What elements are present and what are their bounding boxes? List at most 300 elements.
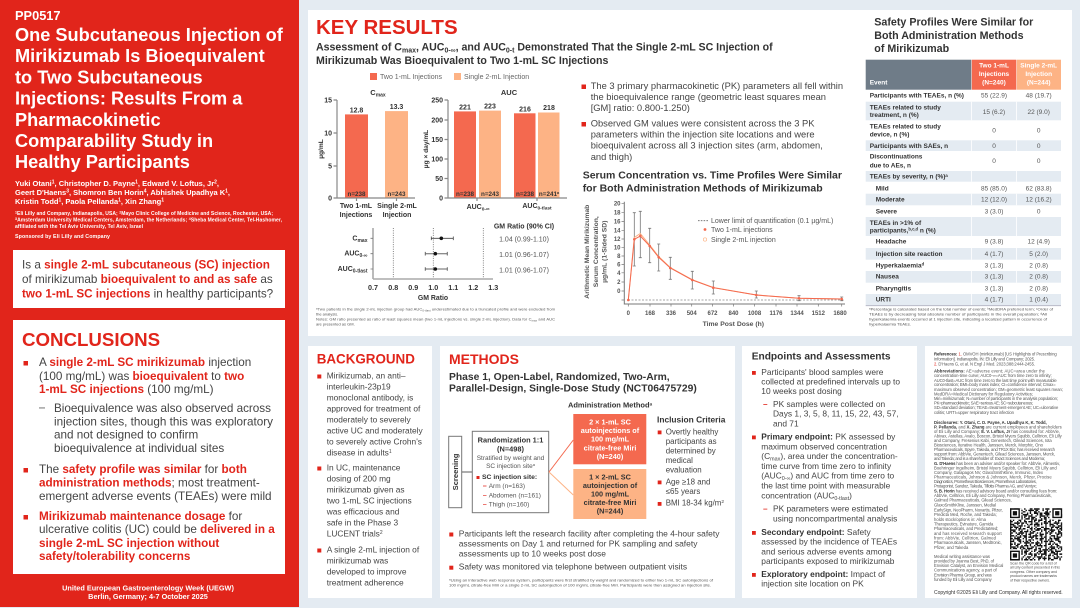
references: Information]. Indianapolis, IN: Eli Lilly and Company; 2025. (934, 356, 1035, 362)
footnote: key results: ᵃTwo patients in the single 2-mL injection group had AUC (316, 306, 422, 312)
disclosures: and Company, Fresenius Kabi, Genentech, Gilead Sciences, Iota (934, 438, 1052, 443)
line chart: serum concentration: 1344 (790, 311, 804, 317)
forest plot: GM ratio: C (352, 236, 357, 242)
subheading: assessment: Assessment of C (316, 42, 402, 54)
background bullet 2: safe in the Phase 3 (327, 517, 398, 527)
key findings bullets: The 3 primary pharmacokinetic (PK) parameters all fell within (591, 81, 843, 91)
table header (866, 60, 1061, 90)
authors: , Christopher D. Payne (55, 179, 135, 188)
title: One Subcutaneous Injection of (15, 25, 284, 45)
table values: single 2-mL: 2 (0.8) (1029, 274, 1048, 281)
table values: two 1-mL (981, 93, 1007, 304)
disclosures: G. D'Haens has been an adviser and/or speaker for: AbbVie, Alimentiv, (934, 461, 1060, 466)
table values: single 2-mL: 2 (0.8) (1029, 285, 1048, 292)
endpoint bullet: exploratory: injection site location on PK (761, 579, 864, 589)
QR caption: all Lilly content presented in this (1010, 566, 1060, 570)
table values: two 1-mL: 85 (85.0) (981, 185, 1007, 192)
background bullet 2: In UC, maintenance (327, 462, 401, 472)
key findings bullets (582, 81, 843, 162)
forest plot: GM ratio: 1.2 (468, 283, 478, 292)
disclosures: Protagonist, Sandoz, Takeda, Tillotts Pharma AG, and Ventyx; (934, 484, 1037, 489)
table values: single 2-mL: 1 (0.4) (1029, 297, 1048, 304)
title: Comparability Study in (15, 131, 213, 151)
abbreviations: Abbreviations: AE=adverse event; AUC=area under the (934, 368, 1046, 374)
sponsor: Sponsored by Eli Lilly and Company (15, 234, 110, 240)
line chart: serum concentration: 18 (614, 211, 621, 217)
bar chart: AUC: 100 (431, 156, 443, 164)
background bullet 1: approved for treatment of (327, 403, 421, 413)
title: to Two Subcutaneous (15, 67, 203, 87)
forest plot: GM ratio: 0-∞ (359, 253, 368, 259)
conclusion bullet 3: safety/tolerability concerns (39, 550, 191, 563)
table header: Event (870, 80, 888, 87)
forest plot: GM ratio: 0.9 (408, 283, 418, 292)
disclosures: AbbVie, Celltrion, Eli Lilly and Company, Ferring Pharmaceuticals, (934, 493, 1052, 498)
panel: methods (440, 346, 735, 598)
heading: serum concentration: for Both Administration Methods of Mirikizumab (583, 183, 823, 195)
abbreviations: colitis; URTI=upper respiratory tract infection (934, 410, 1015, 415)
background bullet 2: two 1-mL SC injections (327, 495, 412, 505)
authors: Kristin Todd (15, 197, 58, 206)
conclusion bullet 1 (24, 356, 273, 455)
conclusion bullet 3: ulcerative colitis (UC) could be delivered in a (39, 523, 275, 536)
bar chart: AUC: 150 (431, 137, 443, 144)
panel: endpoints and assessments (742, 346, 917, 598)
table row labels: Moderate (876, 197, 905, 204)
methods bullets: Safety was monitored via telephone between outpatient visits (459, 562, 687, 572)
footnote: key results (316, 306, 556, 326)
disclosures: Predicta Med, Roche, and Takeda; (934, 512, 997, 517)
authors: 1 (161, 198, 164, 204)
bar chart: AUC: AUC (467, 204, 482, 211)
bar chart: AUC: 0-tlast (538, 206, 552, 212)
arrow: to single 2-mL arm (549, 472, 573, 495)
table values: single 2-mL (1026, 93, 1052, 304)
methods bullets (449, 528, 720, 572)
bar chart: AUC: AUC (501, 88, 518, 97)
table row labels: Severe (876, 208, 897, 215)
endpoint bullet: sampling: collected at predefined intervals up to (761, 376, 900, 386)
disclosures: Diagnostics, Prometheus Biosciences, Prometheus Laboratories, (934, 479, 1037, 484)
line chart: serum concentration: Serum Concentration, (593, 216, 600, 287)
conclusion bullet 1: injection sites, though this was exploratory (54, 416, 273, 428)
endpoint bullet: primary: concentration (AUC (761, 490, 834, 500)
table values: two 1-mL: 12 (12.0) (981, 197, 1007, 204)
authors: 1 (225, 188, 228, 194)
inclusion criteria: participants as (666, 437, 717, 446)
medical writing note: Envision Pharma Group, and was (934, 572, 992, 577)
bar chart: Cmax: Injections (340, 212, 372, 219)
endpoint bullet: primary: PK parameters were estimated (773, 504, 888, 514)
footnote: safety table: hyperkalaemia TEAEs. (869, 322, 911, 326)
bar chart: Cmax: 0 (328, 196, 332, 202)
box: single 2-mL arm: 1 × 2-mL SC (589, 472, 632, 481)
panel: title sidebar (0, 0, 299, 607)
line chart: serum concentration: 10 (614, 246, 621, 252)
background bullet 2: mirikizumab given as (327, 484, 405, 494)
bar chart: Cmax: n=243 (387, 191, 406, 198)
title: Mirikizumab Is Bioequivalent (15, 46, 265, 66)
conclusion bullet 1: bioequivalence at individual sites (54, 442, 224, 455)
subheading: assessment: 0-t (506, 48, 515, 54)
background bullet 1 (317, 370, 424, 457)
bar chart: Cmax: C (370, 88, 376, 97)
background bullet 2 (317, 462, 412, 538)
table header: Single 2-mL (1020, 62, 1057, 70)
label: administration method: a (650, 401, 653, 406)
subheading: assessment: Mirikizumab Was Bioequivalent to Two 1-mL SC Injections (316, 55, 608, 67)
inclusion criteria: Inclusion Criteria (657, 415, 726, 425)
label: administration method: Administration Method (568, 400, 650, 409)
abbreviations: Miri=mirikizumab; N=number of participants in the analysis population; (934, 396, 1058, 401)
authors: , (228, 188, 230, 197)
heading: safety profiles: Safety Profiles Were Similar for (874, 17, 1033, 29)
bar chart: Cmax: 15 (324, 98, 332, 104)
disclosures: Abivax, Astellas, Avalo, Boscon, Bristol Myers Squibb, Celltrion, Eli Lilly (934, 434, 1063, 438)
methods bullets: assessments on Day 1 and returned for PK sampling and safety (459, 538, 698, 548)
bar chart: Cmax: 12.8 (350, 108, 363, 114)
footer: congress (62, 584, 234, 601)
table row labels: n (%) (918, 228, 936, 234)
methods bullets: assessments up to 10 weeks post dose (459, 548, 606, 558)
bar chart: AUC: 221 (459, 104, 471, 112)
methods bullets: Participants left the research facility after completing the 4-hour safety (459, 528, 720, 538)
subheading: assessment: Demonstrated That the Single 2-mL SC Injection of (514, 42, 773, 54)
abbreviations: concentration-time curve; AUC0-∞=AUC from time zero to infinity; (934, 373, 1052, 378)
bar chart: AUC: 200 (431, 118, 443, 124)
box: randomization (472, 431, 549, 513)
conclusion bullet 1: (100 mg/mL) was bioequivalent to two (39, 370, 244, 383)
disclosures: and Takeda; and is a shareholder of: Exact Sciences and Moderna; (934, 456, 1045, 461)
disclosures: Pharmaceuticals, Janssen, Medtronic, (934, 540, 1002, 545)
line chart: serum concentration: 1176 (769, 311, 783, 317)
bar chart: AUC: a (557, 191, 560, 195)
box: single 2-mL arm: autoinjection of (583, 481, 638, 490)
medical writing note (934, 554, 1003, 582)
endpoint bullet: primary: ), area under the concentration- (780, 451, 898, 461)
endpoint bullet: primary: (AUC (761, 471, 782, 481)
footnote: methods: ᵃUsing an interactive web response system, participants were first stratified by weight and randomized to either two 1-mL SC autoinjections of (449, 578, 714, 583)
table values: two 1-mL: 3 (1.3) (985, 285, 1003, 292)
table values: single 2-mL: 0 (1037, 128, 1041, 134)
heading: serum concentration (583, 169, 842, 195)
footnote: key results: Notes: GM ratio presented as ratio of least squares mean (two 1-mL injections vs. single 2-mL injection). Data for C (316, 316, 531, 322)
box: single 2-mL arm: citrate-free Miri (584, 498, 636, 507)
table values: two 1-mL: 3 (1.3) (985, 263, 1003, 270)
box: randomization: Abdomen (n=161) (489, 492, 541, 499)
QR caption: congress. Other company and (1010, 570, 1057, 574)
footnote: key results: the analysis. (316, 312, 338, 316)
bar chart: Cmax: Two 1-mL (340, 203, 373, 210)
box: randomization: Thigh (n=160) (489, 502, 529, 509)
references (934, 352, 1057, 366)
medical writing note: provided by Joanna Best, PhD, of (934, 558, 995, 564)
box: single 2-mL arm: (N=244) (597, 506, 624, 516)
line chart: serum concentration: 504 (687, 311, 697, 317)
table values: two 1-mL: 3 (1.3) (985, 274, 1003, 281)
footnote: key results: max (532, 318, 538, 322)
bar chart: AUC: µg × day/mL (423, 130, 430, 168)
authors: , (217, 179, 219, 188)
disclosures: holds stock/options in: Alma (934, 517, 987, 522)
QR caption (1010, 562, 1060, 582)
affiliations: Amsterdam University Medical Centers, Amsterdam, the Netherlands; (17, 218, 189, 224)
inclusion criteria: evaluation (666, 465, 702, 474)
bar chart: Cmax: Single 2-mL (377, 203, 418, 210)
footnote: safety table: TEAEs is by decreasing total absolute number of participants in the overall population; ᵈAll (869, 312, 1047, 316)
footnote: key results: underestimated due to a truncated profile and were excluded from (431, 306, 556, 312)
forest plot: GM ratio: 0.8 (388, 283, 398, 292)
disclosures: Biosciences, Iterative Health, Janssen, Merck, Morphic, Ono (934, 443, 1044, 448)
table row labels: Discontinuations (870, 154, 923, 161)
table values: two 1-mL: 4 (1.7) (985, 297, 1003, 304)
heading: METHODS (449, 351, 519, 367)
table values: single 2-mL: 0 (1037, 208, 1041, 215)
table row labels (870, 93, 964, 304)
references: 2. D'Haens G, et al. N Engl J Med. 2023;388:2444-2455. (934, 362, 1035, 366)
table row labels: Participants with TEAEs, n (%) (870, 93, 964, 100)
line chart: serum concentration: 6 (617, 262, 621, 268)
background bullet 1: interleukin-23p19 (327, 381, 391, 391)
heading: Endpoints and Assessments (752, 351, 891, 362)
endpoint bullet: secondary: participants exposed to mirikizumab (761, 556, 895, 566)
background bullet 1: active UC and moderately (327, 425, 424, 435)
line chart: serum concentration: 16 (614, 220, 621, 226)
affiliations: Sheba Medical Center, Tel-Hashomer, (191, 218, 283, 224)
abbreviations: AUC0-tlast=AUC from time zero to the last time point with measurable (934, 378, 1057, 383)
authors: 3 (66, 188, 69, 194)
safety table (866, 60, 1061, 306)
line chart: serum concentration: 672 (707, 311, 718, 317)
endpoint bullet: primary: ) and AUC from time zero to (790, 471, 895, 481)
table row labels: Headache (876, 239, 907, 246)
table values: single 2-mL: 0 (1037, 143, 1041, 150)
forest plot: GM ratio (338, 224, 554, 302)
copyright: Copyright ©2025 Eli Lilly and Company. All rights reserved. (934, 589, 1063, 596)
table header: (N=244) (1027, 80, 1051, 87)
table row labels: Hyperkalaemia (876, 263, 922, 270)
endpoint bullet: primary: max (770, 456, 781, 462)
table values: two 1-mL: 0 (992, 158, 996, 165)
box: randomization: SC injection site: (482, 474, 537, 481)
line chart: serum concentration: 0 (627, 311, 631, 317)
authors: 4 (144, 188, 147, 194)
bar chart: Cmax: n=238 (347, 191, 366, 198)
disclosures: of Eli Lilly and Company; E. V. Loftus, Jr has consulted for: AbbVie, (934, 429, 1060, 434)
conclusion bullet 3 (24, 510, 275, 563)
footnote: methods: 100 mg/mL citrate-free Miri or a single 2-mL SC autoinjection of 100 mg/mL citrate-free Miri. Participants were then assigned an injection site. (449, 582, 711, 588)
disclosures: GlaxoSmithKline, Janssen, Medial (934, 503, 996, 508)
endpoint bullet: secondary: Secondary endpoint: Safety (761, 527, 871, 537)
table values: single 2-mL: 0 (1037, 158, 1041, 165)
QR caption: product names are trademarks (1010, 574, 1057, 578)
box: screening: Screening (451, 453, 460, 490)
subheading: assessment: , and AUC (456, 42, 506, 54)
affiliations: 3 (15, 217, 17, 221)
forest plot: GM ratio: GM Ratio (90% CI) (494, 224, 554, 230)
disclosures (934, 420, 1063, 550)
line chart: serum concentration: 840 (728, 311, 739, 317)
disclosures: and has received research support (934, 531, 1003, 536)
table row labels: d (922, 262, 925, 267)
conclusion bullet 1: Bioequivalence was also observed across (54, 402, 271, 415)
line chart: serum concentration: 4 (617, 271, 621, 277)
authors: 1 (58, 198, 61, 204)
table row labels: TEAEs by severity, n (%)ᵃ (870, 174, 948, 181)
forest plot: GM ratio: 0-tlast (353, 268, 368, 274)
affiliations: 4 (189, 217, 191, 221)
forest plot: GM ratio: 1.01 (0.96-1.07) (499, 252, 549, 259)
box: two 1-mL arm (573, 414, 646, 464)
box: randomization: a (533, 462, 536, 467)
key findings bullets: parameters within the injection site locations and were (591, 130, 815, 140)
authors: , Xin Zhang (121, 197, 162, 206)
subheading: assessment: max (402, 48, 416, 54)
authors: Geert D'Haens (15, 188, 66, 197)
bar chart: AUC: n=238 (456, 191, 475, 198)
disclosures: Company, Galapagos NV, GlaxoSmithKline, Immunic, Index (934, 470, 1044, 475)
bar chart: Cmax: max (376, 92, 386, 98)
authors: 1 (118, 198, 121, 204)
disclosures: support from: AbbVie, Genentech, Gilead Sciences, Janssen, Merck, (934, 452, 1055, 457)
box: randomization: Stratified by weight and (477, 455, 545, 462)
table row labels: URTI (876, 297, 891, 304)
bar chart: AUC: n=243 (481, 191, 500, 198)
key findings bullets: the bioequivalence range (geometric least squares mean (591, 92, 826, 102)
background bullet 3: treatment adherence (327, 578, 404, 588)
inclusion criteria: ≤65 years (666, 487, 700, 496)
table row labels: Mild (876, 185, 889, 192)
conclusion bullet 2: emergent adverse events (TEAEs) were mild (39, 490, 272, 503)
conclusion bullet 1: A single 2-mL SC mirikizumab injection (39, 356, 251, 369)
arrow: to two 1-mL arm (549, 440, 573, 472)
endpoint bullet: sampling: and 71 (773, 418, 799, 428)
endpoint bullet: exploratory: Exploratory endpoint: Impact of (761, 569, 886, 579)
table values: two 1-mL: 9 (3.8) (985, 239, 1003, 246)
background bullet 2: 2 (380, 530, 383, 536)
authors: 2 (214, 180, 217, 186)
panel: background (308, 346, 432, 598)
conclusion bullet 2: administration methods; most treatment- (39, 476, 260, 490)
bar chart: AUC: 250 (431, 98, 443, 104)
table row labels: TEAEs in >1% of (870, 220, 922, 227)
endpoint bullet: sampling: Days 1, 3, 5, 8, 11, 15, 22, 43, 57, (773, 409, 899, 419)
conclusion bullet 3: Mirikizumab maintenance dosage for (39, 510, 242, 523)
panel: key results and safety (308, 10, 1072, 336)
background bullet 1: disease in adults (327, 447, 389, 457)
table values: two 1-mL: 4 (1.7) (985, 251, 1003, 258)
endpoint bullet: sampling: 10 weeks post dosing (761, 386, 842, 396)
disclosures: from: AbbVie, Celltrion, Galmed (934, 536, 997, 540)
conclusion bullet 3: single 2-mL SC injection without (39, 537, 219, 550)
endpoint bullet: sampling (752, 367, 900, 428)
key findings bullets: bioequivalent across all 3 injection sites (arm, abdomen, (591, 141, 823, 151)
medical writing note: Communications agency, a part of (934, 568, 998, 573)
table values: two 1-mL: 55 (22.9) (981, 93, 1007, 100)
panel: conclusions (13, 320, 285, 574)
footnote: safety table: hyperkalaemia events occurred at 1 injection site, indicating a localized pattern in occurrence of (869, 316, 1048, 322)
disclosures: Boehringer Ingelheim, Bristol Myers Squibb, Celltrion, Eli Lilly and (934, 465, 1057, 470)
table values: single 2-mL: 12 (4.9) (1027, 239, 1050, 246)
table row bands (866, 102, 1061, 306)
forest plot: GM ratio: 1.3 (488, 283, 498, 292)
forest plot: GM ratio: max (357, 238, 368, 244)
affiliations: Mayo Clinic College of Medicine and Science, Rochester, USA; (121, 211, 273, 217)
background bullet 2: was efficacious and (326, 506, 400, 516)
bar chart: Cmax: Injection (383, 212, 411, 219)
line chart: serum concentration: 1680 (833, 311, 847, 317)
box: single 2-mL arm (573, 469, 646, 519)
heading: safety profiles: of Mirikizumab (874, 43, 950, 55)
endpoint bullet: primary: using noncompartmental analysis (773, 514, 897, 524)
footnote: methods (449, 578, 714, 588)
line chart: serum concentration: 2 (617, 280, 621, 286)
table row labels: Injection site reaction (876, 251, 943, 258)
forest plot: GM ratio: GM Ratio (418, 295, 448, 302)
inclusion criteria: Age ≥18 and (666, 477, 710, 486)
background bullet 1: moderately to severely (327, 414, 411, 424)
subheading: assessment: 0-∞ (444, 48, 456, 54)
bar chart: AUC: 223 (484, 104, 496, 110)
table values: two 1-mL: 15 (6.2) (983, 109, 1005, 116)
inclusion criteria: BMI 18-34 kg/m (666, 499, 721, 508)
background bullet 3: A single 2-mL injection of (327, 544, 420, 554)
endpoint bullet: secondary: assessed by the incidence of TEAEs (761, 536, 897, 546)
affiliations: Eli Lilly and Company, Indianapolis, USA; (17, 211, 119, 217)
QR caption: Scan the QR code for a list of (1010, 562, 1058, 566)
line chart: serum concentration: 14 (614, 229, 621, 235)
abbreviations (934, 368, 1063, 415)
box: randomization: Arm (n=163) (489, 483, 525, 490)
heading: BACKGROUND (317, 351, 415, 366)
heading: CONCLUSIONS (22, 329, 160, 350)
authors: , Edward V. Loftus, Jr (138, 179, 214, 188)
medical writing note: Medical writing assistance was (934, 554, 990, 559)
abbreviations: concentration; BMI=body mass index; CI=confidence interval; Cmax= (934, 382, 1056, 387)
background bullet 3: developed to improve (327, 566, 407, 576)
background bullet 1: 1 (389, 449, 392, 455)
conclusion bullet 2 (24, 463, 272, 503)
disclosures: Disclosures: Y. Otani, C. D. Payne, A. Upadhya K, K. Todd, (934, 420, 1047, 425)
background bullet 2: LUCENT trials (327, 528, 380, 538)
line chart: serum concentration (584, 201, 847, 328)
line chart: serum concentration: 12 (614, 237, 621, 243)
bar chart: AUC: n=238 (516, 191, 535, 198)
table row labels: device, n (%) (870, 132, 909, 138)
panel: study question: two 1-mL SC injections in healthy participants? (22, 288, 274, 300)
box: screening (449, 436, 462, 508)
line chart: serum concentration: Single 2-mL injection (711, 237, 776, 244)
endpoint bullet: primary (752, 431, 898, 524)
table values: two 1-mL: 0 (992, 143, 996, 150)
panel: study question: of mirikizumab bioequivalent to and as safe as (22, 273, 273, 286)
subheading: assessment (316, 42, 773, 67)
abbreviations: MedDRA=Medical Dictionary for Regulatory Activities; (934, 392, 1033, 396)
forest plot: GM ratio: 1.0 (428, 283, 438, 292)
table header: Injection (1025, 71, 1052, 78)
disclosures: EarlySign, NeoPharm, Novartis, Pfizer, (934, 508, 1003, 512)
endpoint bullet: secondary: and serious adverse events among (761, 546, 892, 556)
background bullet 3: mirikizumab was (327, 555, 388, 565)
authors: 1 (135, 180, 138, 186)
authors: , Shomron Ben Horin (69, 188, 144, 197)
affiliations (15, 210, 283, 230)
affiliations: affiliated with the Tel Aviv University, Tel Aviv, Israel (15, 224, 144, 230)
panel: study question: Is a single 2-mL subcutaneous (SC) injection (22, 258, 270, 272)
authors: , Abhishek Upadhya K (147, 188, 226, 197)
disclosures: Pharmaceuticals, and PredictaMed; (934, 526, 998, 531)
table row labels: Nausea (876, 274, 899, 281)
